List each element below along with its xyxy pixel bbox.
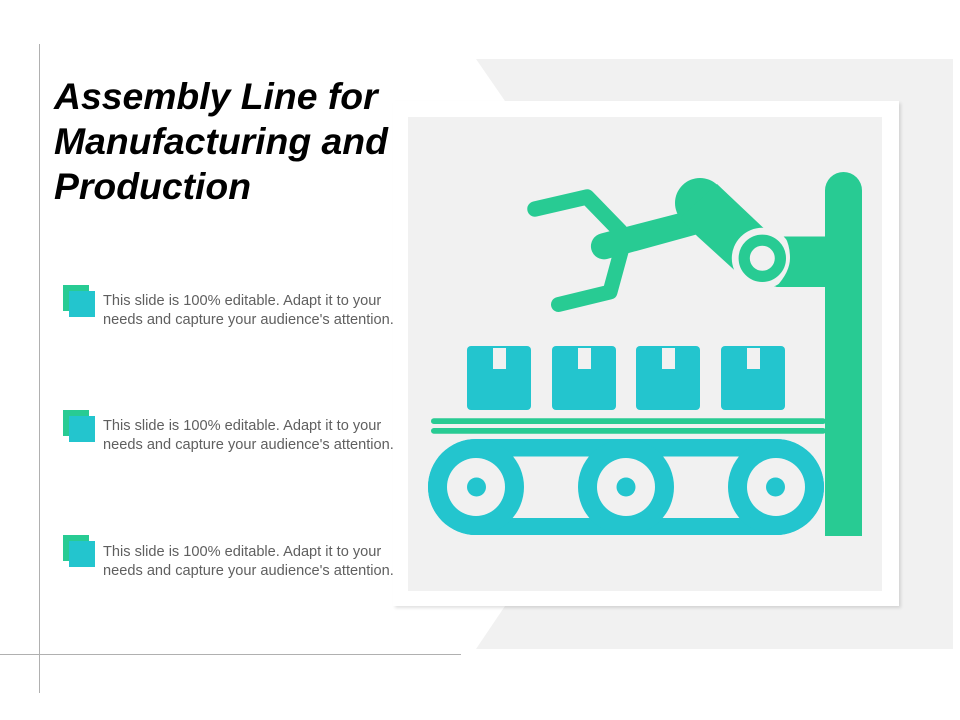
pillar xyxy=(825,172,862,536)
bullet icon 1 xyxy=(63,285,95,317)
conveyor belt xyxy=(428,439,824,535)
bullet text 1: This slide is 100% editable. Adapt it to your xyxy=(103,293,381,309)
box 3 xyxy=(636,346,700,410)
box 1 xyxy=(467,346,531,410)
roller 2 xyxy=(597,458,655,516)
lower finger xyxy=(558,248,622,304)
roller 3 xyxy=(747,458,805,516)
title: Manufacturing and xyxy=(54,120,388,162)
title xyxy=(53,75,389,207)
bullet icon 2 xyxy=(63,410,95,442)
illustration card xyxy=(393,101,899,606)
bullet text 2: needs and capture your audience's attention. xyxy=(103,437,394,453)
bullet text 3: needs and capture your audience's attention. xyxy=(103,563,394,579)
box 4 xyxy=(721,346,785,410)
joint xyxy=(744,240,780,276)
joint halo xyxy=(732,228,793,289)
illustration backdrop xyxy=(408,117,882,591)
title: Production xyxy=(54,165,251,207)
bullet text 2: This slide is 100% editable. Adapt it to your xyxy=(103,418,381,434)
bullet text 3 xyxy=(103,544,394,579)
bullet icon 3 xyxy=(63,535,95,567)
upper arm xyxy=(675,178,772,277)
conveyor rails xyxy=(431,418,826,434)
bullet text 2 xyxy=(103,418,394,453)
bullet text 1 xyxy=(103,293,394,328)
robot arm xyxy=(535,172,862,536)
forearm xyxy=(591,214,720,259)
arm mount xyxy=(770,236,826,286)
bullet text 3: This slide is 100% editable. Adapt it to your xyxy=(103,544,381,560)
bullet text 1: needs and capture your audience's attention. xyxy=(103,312,394,328)
boxes xyxy=(467,346,785,410)
mount edge xyxy=(776,236,825,287)
upper finger xyxy=(535,197,620,231)
box 2 xyxy=(552,346,616,410)
title: Assembly Line for xyxy=(54,75,378,117)
roller 1 xyxy=(447,458,505,516)
